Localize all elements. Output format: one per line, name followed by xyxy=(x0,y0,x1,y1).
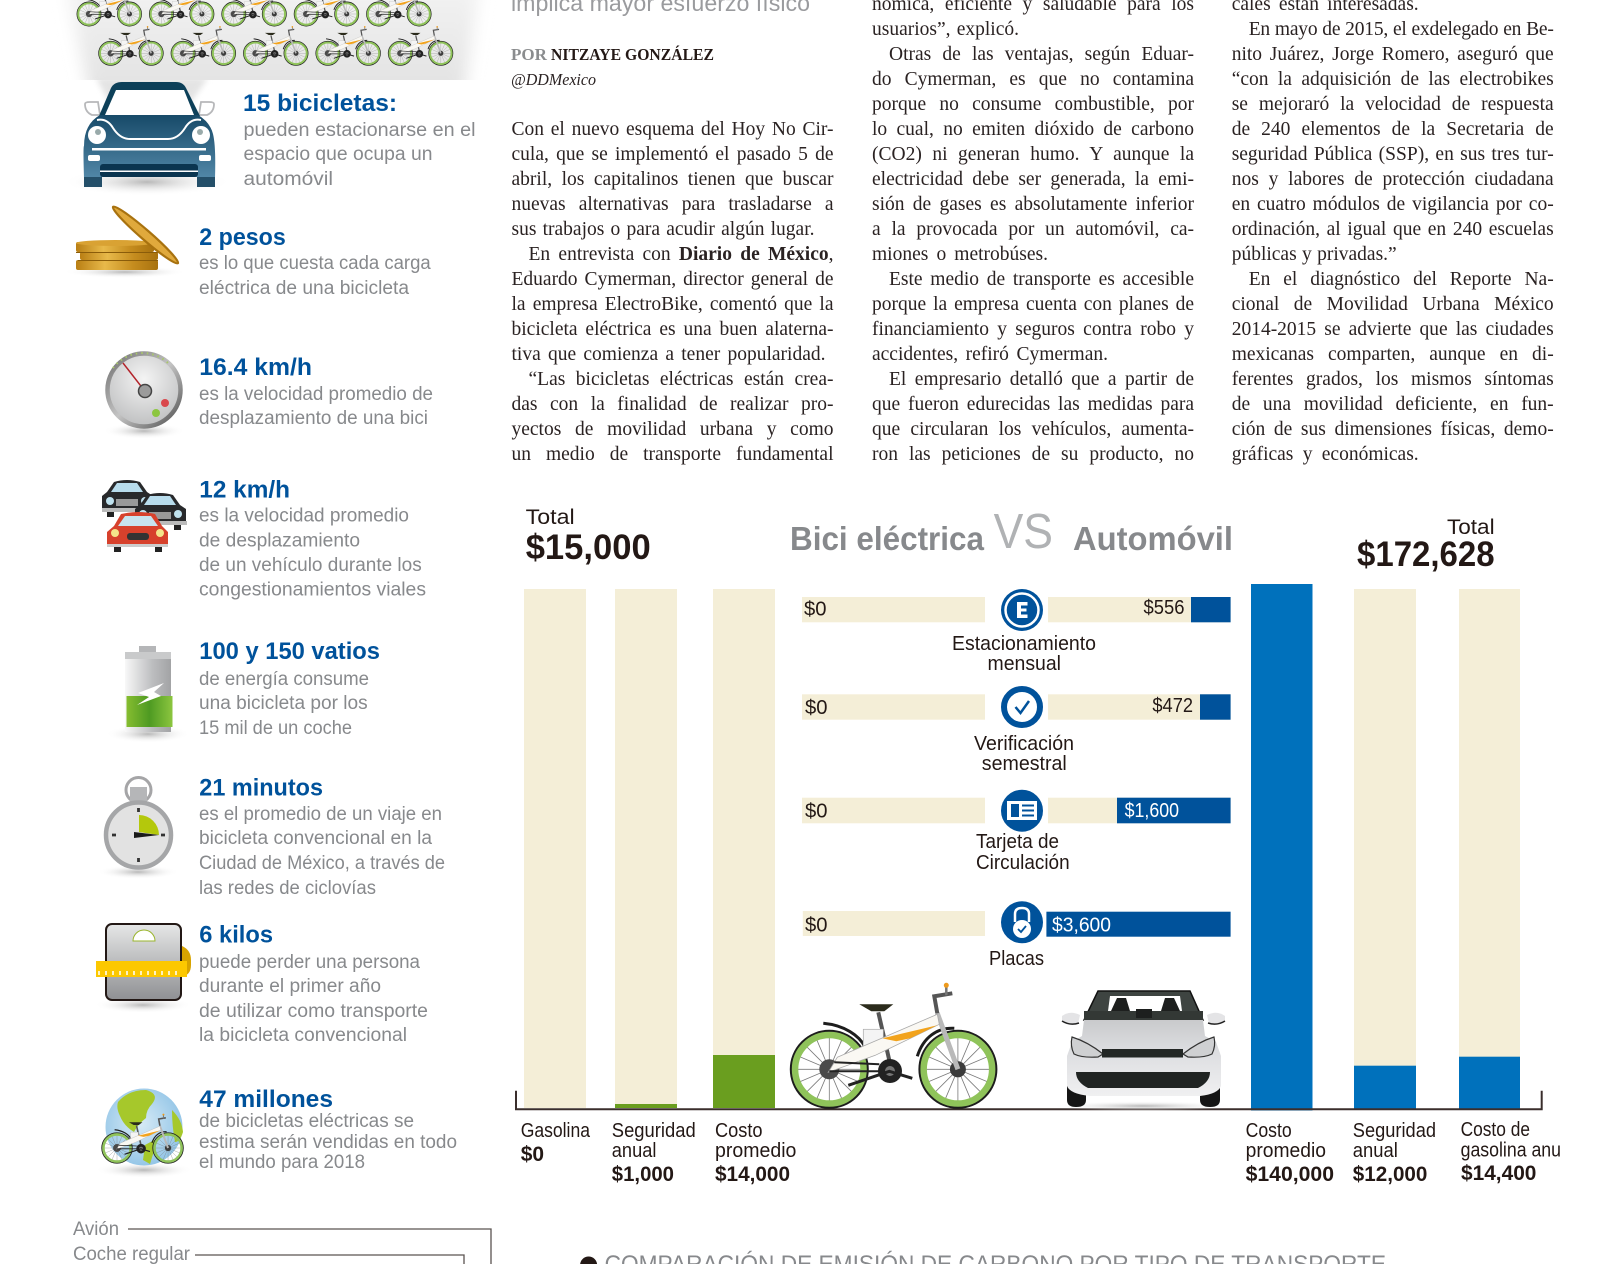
row: verificacion: $472 xyxy=(1152,695,1193,717)
article column 3: públicas y privadas.” xyxy=(1232,244,1397,265)
labels: bici bars xyxy=(521,1120,796,1186)
bar: gasolina bici xyxy=(524,589,586,1108)
article column 1: “Las bicicletas eléctricas están crea- xyxy=(528,369,834,390)
article column 1: Eduardo Cymerman, director general de xyxy=(512,269,834,290)
label: Avión: Avión xyxy=(73,1219,119,1240)
labels: bici bars: $1,000 xyxy=(612,1163,674,1186)
text block: 15 bicicletas: espacio que ocupa un xyxy=(244,144,432,165)
article column 1: un medio de transporte fundamental xyxy=(512,444,834,465)
article column 3: se mejoraró la velocidad de respuesta xyxy=(1232,94,1554,115)
text block: 6 kilos xyxy=(199,922,428,1046)
bar: seguridad auto xyxy=(1354,589,1416,1109)
article column 3: ferentes grados, los mismos síntomas xyxy=(1232,369,1554,390)
article column 1: das con la finalidad de realizar pro- xyxy=(512,394,834,415)
article column 2: que fueron edurecidas las medidas para xyxy=(872,394,1194,415)
axis xyxy=(516,1091,1542,1109)
byline: @DDMexico xyxy=(511,70,596,89)
text block: 6 kilos: durante el primer año xyxy=(199,976,381,997)
article column 1: Con el nuevo esquema del Hoy No Cir- xyxy=(512,119,834,140)
labels: bici bars: anual xyxy=(612,1140,656,1162)
heading: bici vs automovil: VS xyxy=(994,505,1053,559)
icon: speedometer xyxy=(103,353,185,439)
text block: 16.4 km/h xyxy=(199,354,433,429)
text block: 6 kilos: de utilizar como transporte xyxy=(199,1001,428,1022)
text block: 16.4 km/h: es la velocidad promedio de xyxy=(199,384,433,405)
text block: 21 minutos: Ciudad de México, a través de xyxy=(199,853,445,874)
text block: 47 millones xyxy=(199,1086,457,1173)
heading: total auto xyxy=(1357,516,1495,574)
text block: 47 millones: de bicicletas eléctricas se xyxy=(199,1111,414,1132)
text block: 47 millones: 47 millones xyxy=(199,1086,333,1113)
article column 3: ción de sus dimensiones físicas, demo- xyxy=(1232,419,1554,440)
article column 2: financiamiento y seguros contra robo y xyxy=(872,319,1194,340)
text block: 16.4 km/h: desplazamiento de una bici xyxy=(199,408,428,429)
article column 2: Este medio de transporte es accesible xyxy=(889,269,1194,290)
panel: bicycles fan above car xyxy=(71,0,476,102)
text block: 2 pesos: 2 pesos xyxy=(199,224,286,251)
heading: total auto: $172,628 xyxy=(1357,535,1495,574)
text block: 21 minutos: bicicleta convencional en la xyxy=(199,828,432,849)
row: estacionamiento: Estacionamiento xyxy=(952,633,1096,655)
row: tarjeta: $1,600 xyxy=(1125,800,1179,822)
row: estacionamiento: $0 xyxy=(804,599,826,621)
text block: 15 bicicletas: 15 bicicletas: xyxy=(243,90,397,117)
text block: 6 kilos: 6 kilos xyxy=(199,922,273,949)
heading: total bici xyxy=(526,506,651,567)
article column 3: de 240 elementos de la Secretaria de xyxy=(1232,119,1554,140)
labels: bici bars: $14,000 xyxy=(715,1163,790,1186)
icon: weight scale with tape xyxy=(94,924,192,1013)
article column 1: cula, que se implementó el pasado 5 de xyxy=(512,144,834,165)
labels: bici bars: Seguridad xyxy=(612,1120,696,1142)
article column 3: gráficas y económicas. xyxy=(1232,444,1419,465)
text block: 16.4 km/h: 16.4 km/h xyxy=(199,354,312,381)
icon: stopwatch xyxy=(97,778,179,879)
row: verificacion xyxy=(802,689,1231,775)
article column 2: sión de gases es absolutamente inferior xyxy=(872,194,1194,215)
icon: blue car front xyxy=(63,82,231,196)
row: placas xyxy=(803,901,1231,970)
article column 3 xyxy=(1232,0,1554,465)
labels: auto bars: anual xyxy=(1353,1140,1398,1162)
text block: 21 minutos xyxy=(199,775,445,899)
icon: E parking xyxy=(1001,589,1043,631)
article column 2: ron las peticiones de su producto, no xyxy=(872,444,1194,465)
text block: 100 y 150 vatios: una bicicleta por los xyxy=(199,693,368,714)
text block: 2 pesos xyxy=(199,224,431,299)
byline xyxy=(511,45,714,89)
byline: POR xyxy=(511,45,548,64)
article column 1 xyxy=(512,119,834,465)
article column 1: En entrevista con Diario de México, xyxy=(528,244,833,265)
article column 3: nito Juárez, Jorge Romero, aseguró que xyxy=(1232,44,1554,65)
text block: 21 minutos: las redes de ciclovías xyxy=(199,878,376,899)
article column 2: lo cual, no emiten dióxido de carbono xyxy=(872,119,1194,140)
labels: auto bars xyxy=(1246,1119,1561,1186)
labels: auto bars: Costo de xyxy=(1461,1119,1530,1141)
labels: auto bars: Seguridad xyxy=(1353,1120,1436,1142)
labels: auto bars: $14,400 xyxy=(1461,1162,1536,1185)
text block: 21 minutos: 21 minutos xyxy=(199,775,323,802)
article column 3: En el diagnóstico del Reporte Na- xyxy=(1249,269,1554,290)
row: placas: $0 xyxy=(805,915,828,937)
text block: 100 y 150 vatios: de energía consume xyxy=(199,669,369,690)
text block: 6 kilos: la bicicleta convencional xyxy=(199,1025,407,1046)
icon: card xyxy=(1001,790,1043,832)
illustration: electric bicycle xyxy=(791,983,996,1108)
row: verificacion: $0 xyxy=(805,697,828,719)
article column 3: ordinación, al igual que en 240 escuelas xyxy=(1232,219,1554,240)
row: verificacion: semestral xyxy=(982,753,1067,775)
article column 1: nuevas alternativas para trasladarse a xyxy=(512,194,834,215)
article column 1: abril, los capitalinos tienen que buscar xyxy=(512,169,834,190)
labels: auto bars: promedio xyxy=(1246,1140,1326,1162)
icon: check xyxy=(1004,689,1040,725)
article column 2 xyxy=(872,0,1194,465)
article column 3: nos y labores de protección ciudadana xyxy=(1232,169,1554,190)
article column 3: seguridad Pública (SSP), en sus tres tur- xyxy=(1232,144,1554,165)
labels: bici bars: Gasolina xyxy=(521,1120,591,1142)
row: placas: $3,600 xyxy=(1052,915,1111,937)
article column 3: En mayo de 2015, el exdelegado en Be- xyxy=(1249,19,1554,40)
text block: 47 millones: estima serán vendidas en todo xyxy=(199,1132,457,1153)
row: tarjeta: Tarjeta de xyxy=(976,831,1059,853)
text block: 12 km/h: congestionamientos viales xyxy=(199,580,426,601)
article column 2: (CO2) ni generan humo. Y aunque la xyxy=(872,144,1194,165)
illustration: white car xyxy=(1051,991,1235,1111)
row: tarjeta xyxy=(802,790,1231,874)
text block: 12 km/h: 12 km/h xyxy=(199,477,290,504)
article column 1: sus trabajos o para acudir algún lugar. xyxy=(512,219,814,240)
article column 3: “con la adquisición de las electrobikes xyxy=(1232,69,1554,90)
text block: 47 millones: el mundo para 2018 xyxy=(199,1152,365,1173)
heading: total bici: $15,000 xyxy=(526,528,651,567)
article column 2: usuarios”, explicó. xyxy=(872,19,1019,40)
text block: 12 km/h: de un vehículo durante los xyxy=(199,555,422,576)
heading: total bici: Total xyxy=(526,506,575,529)
article column 2: Otras de las ventajas, según Eduar- xyxy=(889,44,1194,65)
text block: 100 y 150 vatios: 15 mil de un coche xyxy=(199,718,352,739)
article column 2: miones o metrobúses. xyxy=(872,244,1048,265)
row: estacionamiento: mensual xyxy=(988,653,1061,675)
text block: 100 y 150 vatios: 100 y 150 vatios xyxy=(199,638,380,665)
row: placas: Placas xyxy=(989,948,1044,970)
row: verificacion: Verificación xyxy=(974,733,1074,755)
parking funnel to car xyxy=(96,78,208,104)
bar: costo promedio auto xyxy=(1251,584,1312,1110)
row: tarjeta: Circulación xyxy=(976,852,1070,874)
article column 3: de una movilidad deficiente, en fun- xyxy=(1232,394,1554,415)
text block: 100 y 150 vatios xyxy=(199,638,380,739)
article column 2: do Cymerman, es que no contamina xyxy=(872,69,1194,90)
article column 1: la empresa ElectroBike, comentó que la xyxy=(512,294,834,315)
heading: bici vs automovil xyxy=(790,505,1233,559)
bar: gasolina auto xyxy=(1459,589,1520,1109)
article column 1: yectos de movilidad urbana y como xyxy=(512,419,834,440)
icon: battery xyxy=(106,646,190,743)
chart: costs comparison xyxy=(516,505,1561,1186)
icon: lock xyxy=(1001,901,1043,943)
text block: 12 km/h: de desplazamiento xyxy=(199,531,360,552)
row of small bicycles top xyxy=(77,0,431,26)
icon: globe with bicycle xyxy=(95,1088,193,1178)
article column 3: cional de Movilidad Urbana México xyxy=(1232,294,1554,315)
row: estacionamiento xyxy=(802,589,1231,675)
text block: 2 pesos: eléctrica de una bicicleta xyxy=(199,278,409,299)
article column 2: El empresario detalló que a partir de xyxy=(889,369,1194,390)
article column 3: mexicanas comparten, aunque en di- xyxy=(1232,344,1554,365)
heading: total auto: Total xyxy=(1447,516,1495,539)
bar: costo promedio bici xyxy=(713,589,775,1108)
article column 2: electricidad debe ser generada, la emi- xyxy=(872,169,1194,190)
icon: coins xyxy=(63,203,187,278)
labels: bici bars: $0 xyxy=(521,1143,544,1166)
text block: 2 pesos: es lo que cuesta cada carga xyxy=(199,253,431,274)
article column 2: porque no consume combustible, por xyxy=(872,94,1194,115)
heading: bici vs automovil: Bici eléctrica xyxy=(790,520,985,557)
labels: bici bars: promedio xyxy=(715,1140,796,1162)
labels: bici bars: Costo xyxy=(715,1120,762,1142)
heading: bici vs automovil: Automóvil xyxy=(1073,520,1233,557)
labels: auto bars: $12,000 xyxy=(1353,1163,1427,1186)
article column 1: tiva que comienza a tener popularidad. xyxy=(512,344,826,365)
text block: 15 bicicletas: automóvil xyxy=(244,169,333,190)
text block: 21 minutos: es el promedio de un viaje en xyxy=(199,804,442,825)
grey parking fan xyxy=(71,0,476,80)
article column 2: accidentes, refiró Cymerman. xyxy=(872,344,1108,365)
bar: seguridad bici xyxy=(615,589,677,1108)
byline: NITZAYE GONZÁLEZ xyxy=(551,45,714,64)
text block: 15 bicicletas xyxy=(243,90,476,190)
row: tarjeta: $0 xyxy=(805,801,828,823)
legend: transport lines xyxy=(73,1219,491,1264)
row: estacionamiento: $556 xyxy=(1144,597,1184,619)
article column 2: que circularan los vehículos, aumenta- xyxy=(872,419,1194,440)
article column 1: bicicleta eléctrica es una buen alaterna- xyxy=(512,319,834,340)
article column 3: en cuatro módulos de vigilancia por co- xyxy=(1232,194,1554,215)
article column 2: a la provocada por un automóvil, ca- xyxy=(872,219,1194,240)
icon: traffic cars xyxy=(102,480,187,552)
text block: 12 km/h xyxy=(199,477,426,601)
text block: 12 km/h: es la velocidad promedio xyxy=(199,506,409,527)
labels: auto bars: Costo xyxy=(1246,1120,1292,1142)
row of small bicycles bottom xyxy=(99,26,453,65)
text block: 15 bicicletas: pueden estacionarse en el xyxy=(244,120,476,141)
labels: auto bars: $140,000 xyxy=(1246,1163,1334,1186)
text block: 6 kilos: puede perder una persona xyxy=(199,952,420,973)
labels: auto bars: gasolina anu xyxy=(1461,1140,1561,1162)
article column 3: 2014-2015 se advierte que las ciudades xyxy=(1232,319,1554,340)
article column 2: porque la empresa cuenta con planes de xyxy=(872,294,1194,315)
